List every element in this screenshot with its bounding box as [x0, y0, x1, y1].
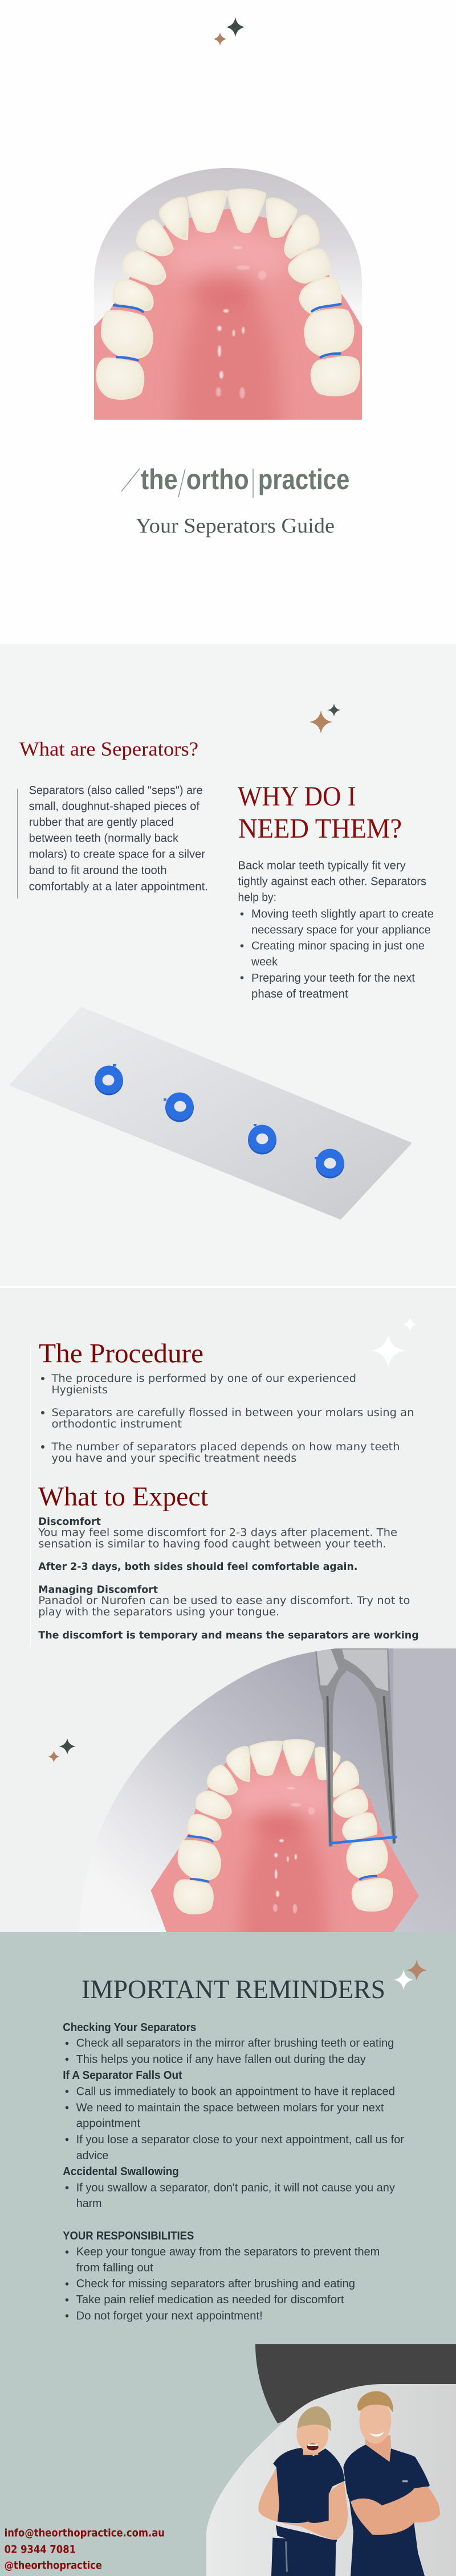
- text block: what to expect: [38, 1516, 419, 1642]
- heading: why do i need them: WHY DO I: [238, 781, 356, 812]
- list: procedure steps: Hygienists: [51, 1384, 108, 1396]
- background: reminders section: [0, 1932, 456, 2576]
- photo: separators on a plate: [11, 1008, 410, 1218]
- logo: the ortho practice: practice: [258, 463, 349, 495]
- text block: reminders list: Checking Your Separators: [63, 2021, 196, 2034]
- text block: reminders list: YOUR RESPONSIBILITIES: [63, 2230, 194, 2242]
- text block: reminders list: Check for missing separators after brushing and eating: [76, 2278, 355, 2290]
- heading: why do i need them: NEED THEM?: [238, 813, 402, 844]
- text block: why separators help: phase of treatment: [251, 988, 348, 1000]
- text block: reminders list: harm: [76, 2197, 102, 2210]
- text block: reminders list: We need to maintain the space between molars for your next: [76, 2102, 384, 2114]
- contact details: 02 9344 7081: [5, 2543, 76, 2556]
- list: procedure steps: you have and your specific treatment needs: [51, 1453, 296, 1465]
- contact details: @theorthopractice: [5, 2559, 102, 2572]
- text block: reminders list: If you swallow a separator, don't panic, it will not cause you any: [76, 2182, 395, 2194]
- text block: what to expect: After 2-3 days, both sides should feel comfortable again.: [38, 1561, 358, 1573]
- list: procedure steps: [41, 1373, 414, 1465]
- text block: why separators help: Moving teeth slightly apart to create: [251, 908, 434, 920]
- icon: blue separator rings: [95, 1064, 344, 1179]
- text block: why separators help: Creating minor spacing in just one: [251, 940, 425, 953]
- text block: definition: rubber that are gently placed: [29, 817, 174, 829]
- text block: what to expect: Managing Discomfort: [38, 1584, 158, 1596]
- photo: placing a separator with pliers: [105, 1648, 456, 1932]
- icon: pliers: [315, 1648, 397, 1847]
- heading: the procedure: The Procedure: [39, 1339, 203, 1369]
- text block: what to expect: sensation is similar to having food caught between your teeth.: [38, 1539, 386, 1550]
- text block: why separators help: necessary space for your appliance: [251, 924, 431, 936]
- background: what are separators section: [0, 644, 456, 1286]
- text block: reminders list: advice: [76, 2150, 108, 2162]
- text block: reminders list: Keep your tongue away from the separators to prevent them: [76, 2246, 380, 2258]
- text block: reminders list: [63, 2021, 404, 2322]
- text block: why separators help: tightly against each other. Separators: [238, 876, 426, 888]
- text block: reminders list: This helps you notice if any have fallen out during the day: [76, 2053, 366, 2066]
- icon: reminders sparkles: [394, 1960, 427, 1990]
- text block: what to expect: You may feel some discomfort for 2-3 days after placement. The: [38, 1527, 397, 1539]
- text block: definition: band to fit around the tooth: [29, 864, 167, 877]
- photo: dental model with separators: [94, 168, 362, 444]
- photo: two orthodontic team members: [206, 2384, 456, 2576]
- text block: what to expect: play with the separators using your tongue.: [38, 1606, 279, 1618]
- list: procedure steps: orthodontic instrument: [51, 1418, 182, 1430]
- text block: reminders list: Accidental Swallowing: [63, 2165, 179, 2178]
- text block: reminders list: Take pain relief medication as needed for discomfort: [76, 2294, 344, 2306]
- icon: cover sparkles: [213, 17, 245, 46]
- text block: what to expect: The discomfort is temporary and means the separators are working: [38, 1630, 419, 1642]
- text block: definition: molars) to create space for a silver: [29, 848, 205, 861]
- text block: reminders list: appointment: [76, 2118, 140, 2130]
- text block: reminders list: Do not forget your next appointment!: [76, 2310, 263, 2322]
- text block: why separators help: help by:: [238, 892, 276, 904]
- text block: why separators help: Preparing your teeth for the next: [251, 972, 415, 985]
- list: procedure steps: The procedure is performed by one of our experienced: [51, 1373, 356, 1385]
- icon: white sparkles: [372, 1317, 417, 1367]
- text block: what to expect: Panadol or Nurofen can be used to ease any discomfort. Try not to: [38, 1595, 410, 1607]
- background: procedure section: [0, 1288, 456, 1932]
- text block: reminders list: from falling out: [76, 2262, 153, 2274]
- text block: reminders list: Call us immediately to book an appointment to have it replaced: [76, 2085, 395, 2098]
- heading: what to expect: What to Expect: [38, 1482, 209, 1512]
- text block: definition: Separators (also called "seps") are: [29, 784, 203, 797]
- icon: procedure sparkles: [48, 1738, 76, 1763]
- logo: the ortho practice: the: [141, 463, 178, 495]
- text block: definition: comfortably at a later appointment.: [29, 880, 208, 893]
- shape: dark curved block: [255, 2344, 456, 2423]
- logo: the ortho practice: [121, 463, 349, 498]
- contact details: info@theorthopractice.com.au: [5, 2527, 165, 2540]
- text block: definition: small, doughnut-shaped pieces of: [29, 800, 199, 813]
- man: [343, 2391, 440, 2576]
- background: cover section: [0, 0, 456, 644]
- heading: why do i need them: [238, 781, 402, 844]
- text block: why separators help: [238, 859, 434, 1000]
- woman: [258, 2406, 348, 2576]
- divider: text column rule: [30, 1343, 31, 1648]
- text block: why separators help: week: [251, 956, 278, 969]
- heading: what are seperators: What are Seperators?: [19, 738, 198, 760]
- subtitle: Your Seperators Guide: [136, 515, 335, 538]
- text block: what to expect: Discomfort: [38, 1516, 101, 1528]
- list: procedure steps: Separators are carefully flossed in between your molars using an: [51, 1407, 414, 1419]
- icon: section two sparkles: [309, 704, 341, 733]
- list: procedure steps: The number of separators placed depends on how many teeth: [51, 1441, 400, 1453]
- text block: reminders list: If you lose a separator close to your next appointment, call us for: [76, 2134, 404, 2146]
- contact details: [5, 2527, 165, 2572]
- text block: reminders list: Check all separators in the mirror after brushing teeth or eating: [76, 2037, 394, 2050]
- heading: important reminders: IMPORTANT REMINDERS: [82, 1975, 385, 2004]
- text block: reminders list: If A Separator Falls Out: [63, 2069, 182, 2082]
- text block: why separators help: Back molar teeth typically fit very: [238, 859, 406, 872]
- text block: definition: [17, 784, 208, 899]
- logo: the ortho practice: ortho: [186, 463, 249, 495]
- text block: definition: between teeth (normally back: [29, 832, 179, 845]
